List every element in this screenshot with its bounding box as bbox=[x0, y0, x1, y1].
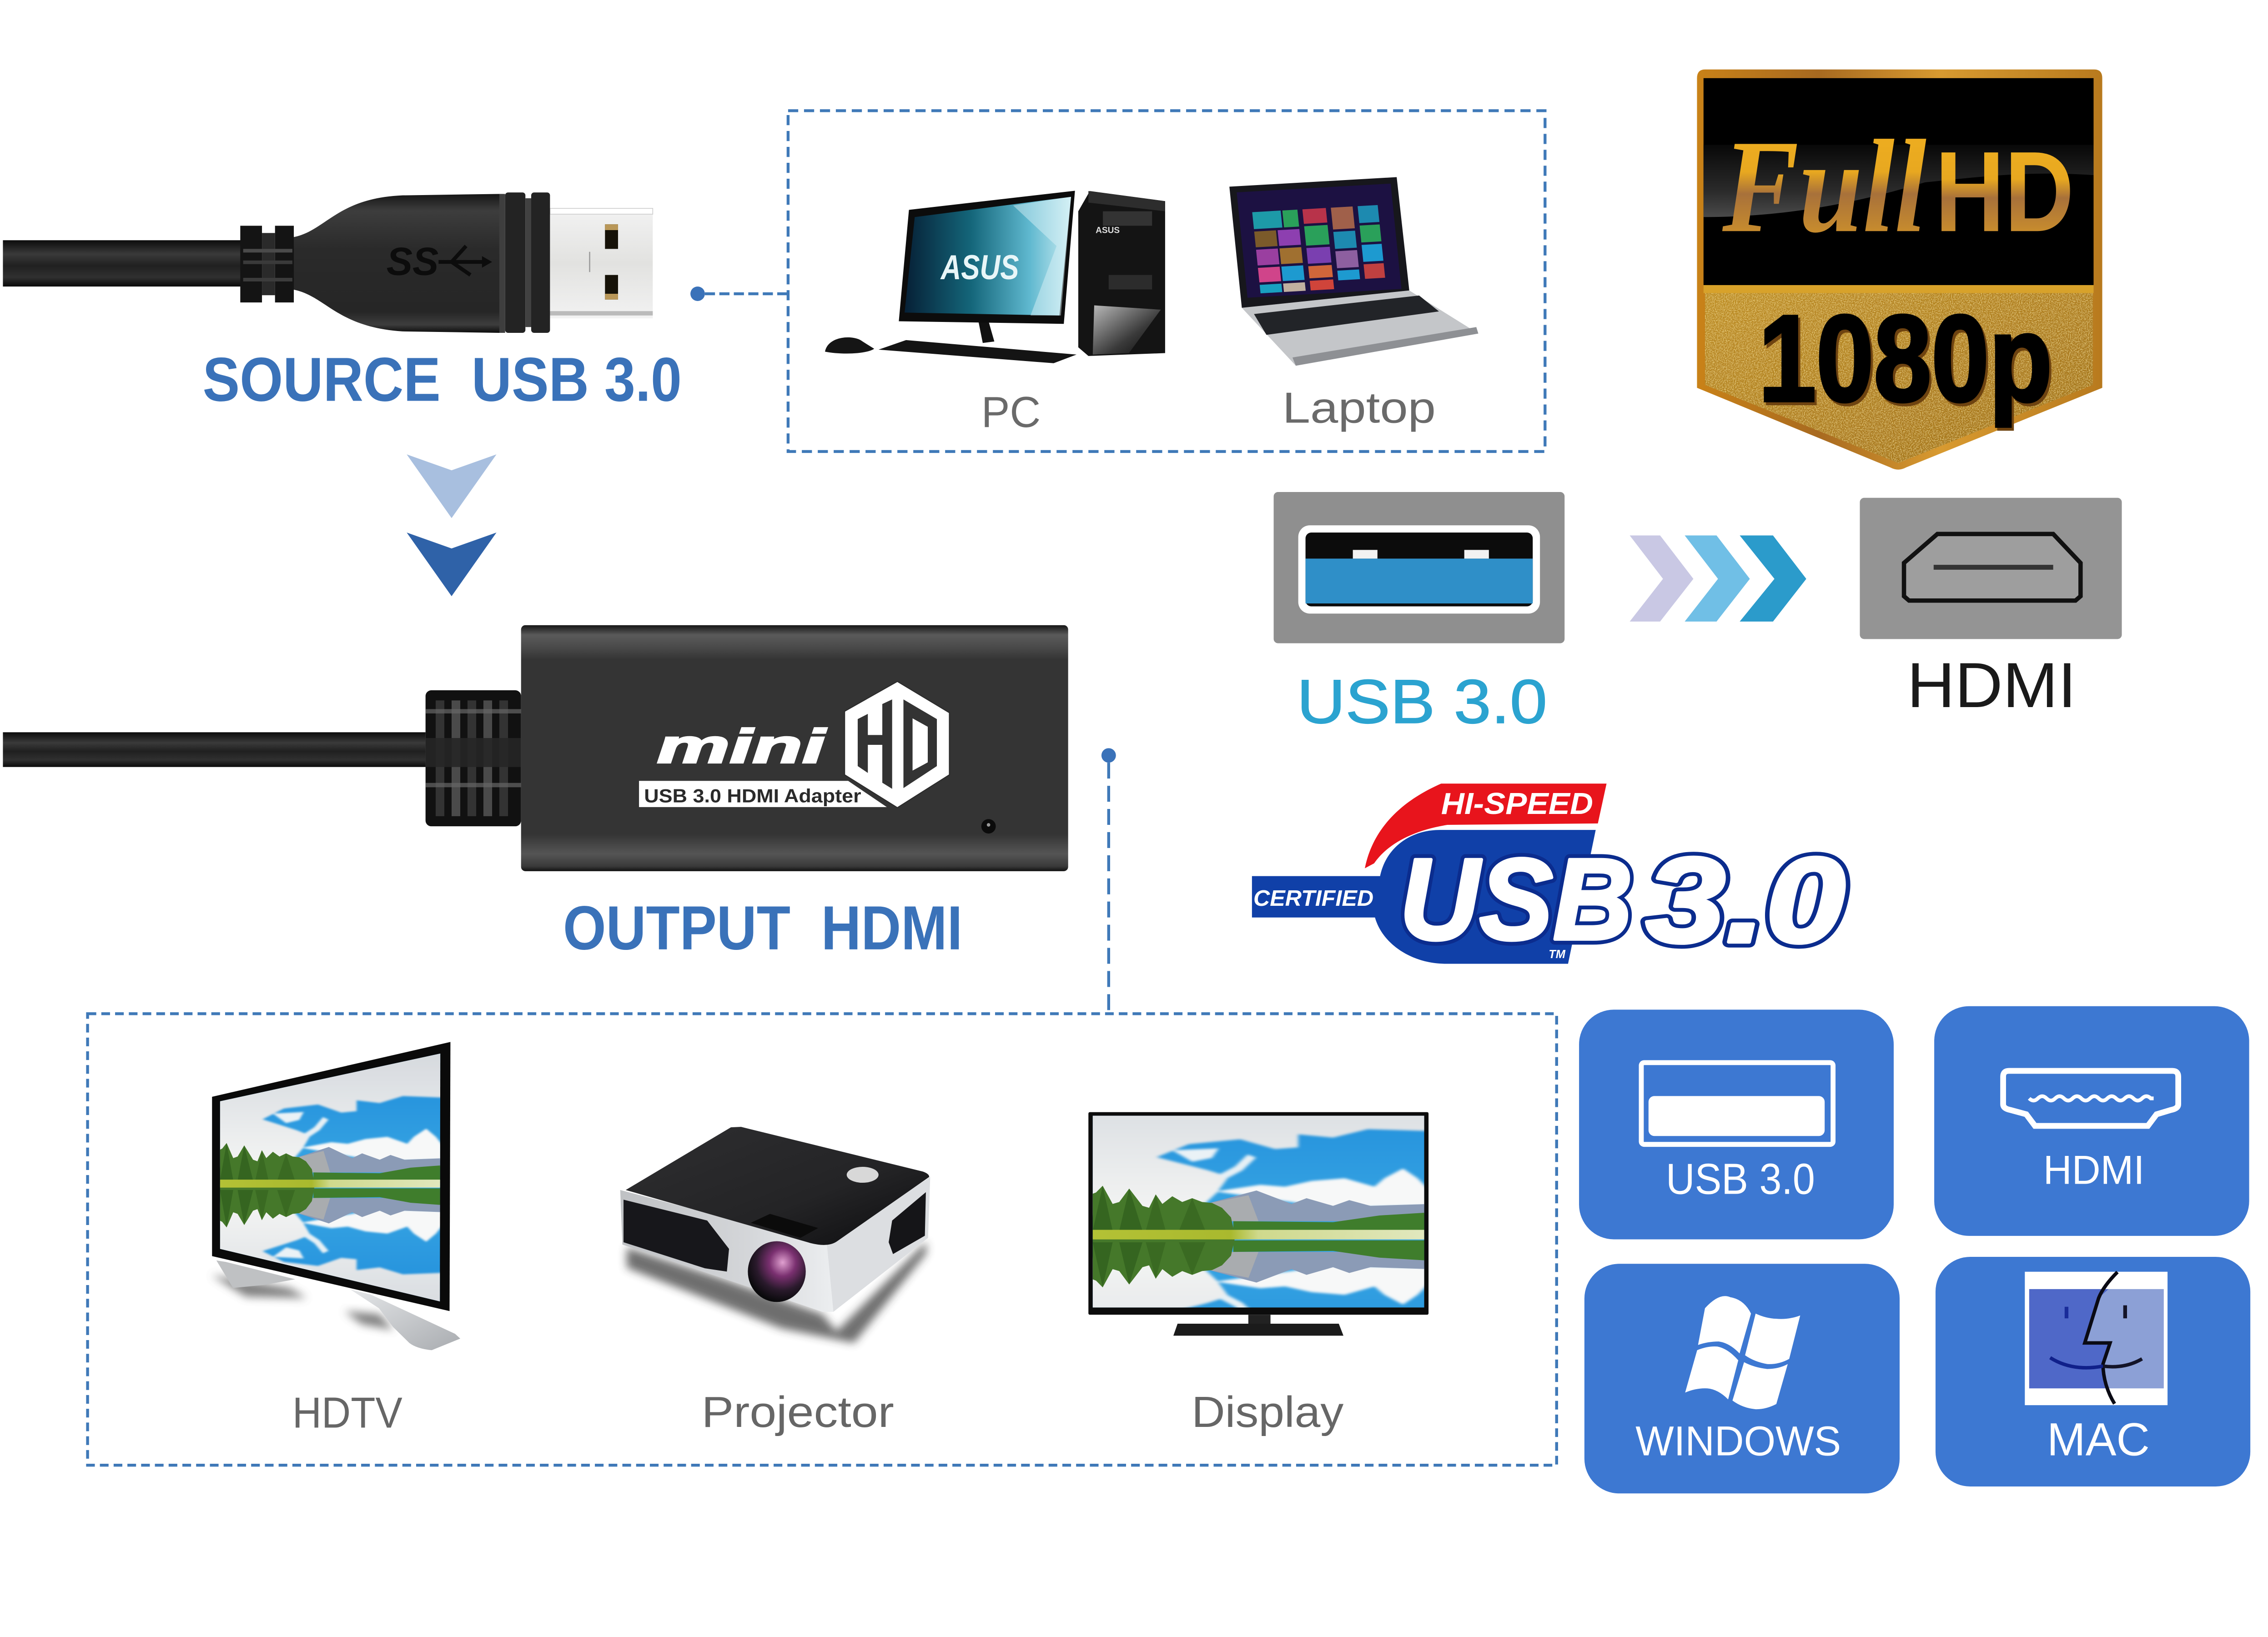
usb 3.0 plug and cable bbox=[3, 192, 653, 333]
icon: usb socket bbox=[1641, 1063, 1833, 1145]
dashed frame bbox=[788, 110, 1545, 452]
icon: laptop bbox=[1229, 177, 1478, 366]
usb 3.0 outline: USB bbox=[1399, 834, 1633, 964]
usb 3.0 wordmark fill bbox=[1399, 832, 1846, 968]
panel: output devices bbox=[88, 1013, 1557, 1465]
label: HDMI bbox=[2043, 1147, 2144, 1192]
usb 3.0 wordmark fill: 3.0 bbox=[1646, 832, 1846, 968]
arrow: source to output dark bbox=[407, 532, 497, 596]
gloss wave bbox=[1704, 145, 2093, 217]
tile: hdmi bbox=[1934, 1006, 2249, 1236]
icon: desktop pc: ASUS bbox=[940, 248, 1019, 287]
logo: certified hi-speed usb 3.0 bbox=[1252, 783, 1846, 968]
superspeed logo bbox=[387, 240, 492, 284]
hdmi adapter and cable bbox=[3, 625, 1068, 871]
icon: mac finder face bbox=[2025, 1272, 2167, 1405]
label: usb 3.0: USB 3.0 bbox=[1297, 667, 1547, 736]
connector: adapter to output devices bbox=[1101, 748, 1116, 1013]
usb cable bbox=[3, 240, 243, 286]
heading: output hdmi: OUTPUT HDMI bbox=[563, 893, 962, 963]
indicator led bbox=[981, 819, 996, 834]
label: MAC bbox=[2047, 1413, 2150, 1465]
strain relief bbox=[240, 226, 294, 302]
black panel bbox=[1704, 78, 2093, 285]
heading: source usb 3.0: SOURCE USB 3.0 bbox=[203, 345, 682, 414]
usb 3.0 outline: 3.0 bbox=[1646, 832, 1846, 968]
arrow: usb to hdmi chevrons bbox=[1629, 536, 1806, 622]
superspeed logo: SS bbox=[387, 240, 438, 284]
icon: hdmi socket bbox=[2003, 1071, 2178, 1126]
icon: display bbox=[1088, 1112, 1429, 1336]
trademark: TM bbox=[1549, 948, 1566, 961]
adapter body bbox=[521, 625, 1068, 871]
1080p shadow and text: 1080p bbox=[1761, 293, 2055, 431]
label: WINDOWS bbox=[1635, 1417, 1841, 1464]
icon: windows logo bbox=[1685, 1296, 1800, 1409]
full text: Full bbox=[1720, 113, 1927, 260]
adapter logo bbox=[639, 682, 949, 807]
label: Display: Display bbox=[1192, 1388, 1344, 1436]
hexagon HD mark bbox=[845, 682, 949, 807]
dashed frame bbox=[88, 1014, 1557, 1465]
gold shield bbox=[1697, 70, 2102, 470]
metal usb connector bbox=[550, 208, 653, 318]
label: PC: PC bbox=[981, 388, 1041, 437]
icon: usb 3.0 port bbox=[1274, 492, 1564, 643]
model label bbox=[639, 781, 887, 807]
tile: mac bbox=[1936, 1257, 2250, 1486]
icon: hdtv bbox=[211, 1042, 460, 1351]
connector: usb to source devices bbox=[690, 286, 787, 301]
badge: full hd 1080p bbox=[1697, 70, 2102, 470]
label: USB 3.0 bbox=[1666, 1155, 1815, 1204]
certified text: CERTIFIED bbox=[1253, 886, 1373, 911]
gold lower panel bbox=[1705, 293, 2093, 463]
hd text: HD bbox=[1935, 128, 2074, 256]
usb 3.0 outline bbox=[1399, 832, 1846, 968]
label: Laptop: Laptop bbox=[1282, 384, 1436, 432]
icon: projector bbox=[620, 1127, 930, 1343]
label: Projector: Projector bbox=[702, 1388, 894, 1436]
moulded plug body bbox=[292, 194, 499, 333]
adapter strain relief bbox=[426, 690, 521, 826]
icon: desktop pc: ASUS bbox=[1096, 226, 1120, 235]
tile: windows bbox=[1584, 1264, 1900, 1493]
certified bar bbox=[1252, 876, 1382, 918]
red swoosh bbox=[1365, 783, 1607, 868]
icon: hdmi port bbox=[1860, 498, 2122, 639]
label text: USB 3.0 HDMI Adapter bbox=[644, 786, 861, 807]
adapter cable bbox=[3, 732, 426, 767]
label: hdmi: HDMI bbox=[1907, 649, 2077, 721]
hi-speed text: HI-SPEED bbox=[1441, 787, 1593, 821]
mini wordmark: mini bbox=[657, 720, 826, 773]
blue body bbox=[1375, 830, 1596, 964]
gold divider bbox=[1704, 285, 2093, 293]
arrow: source to output light bbox=[407, 454, 497, 518]
1080p shadow and text: 1080p bbox=[1759, 290, 2052, 428]
usb 3.0 wordmark fill: USB bbox=[1399, 834, 1633, 964]
plug collar ribs bbox=[499, 192, 550, 333]
panel: source devices bbox=[788, 110, 1545, 452]
tile: usb 3.0 bbox=[1579, 1009, 1894, 1239]
label: HDTV: HDTV bbox=[292, 1389, 402, 1437]
icon: desktop pc bbox=[825, 191, 1165, 363]
